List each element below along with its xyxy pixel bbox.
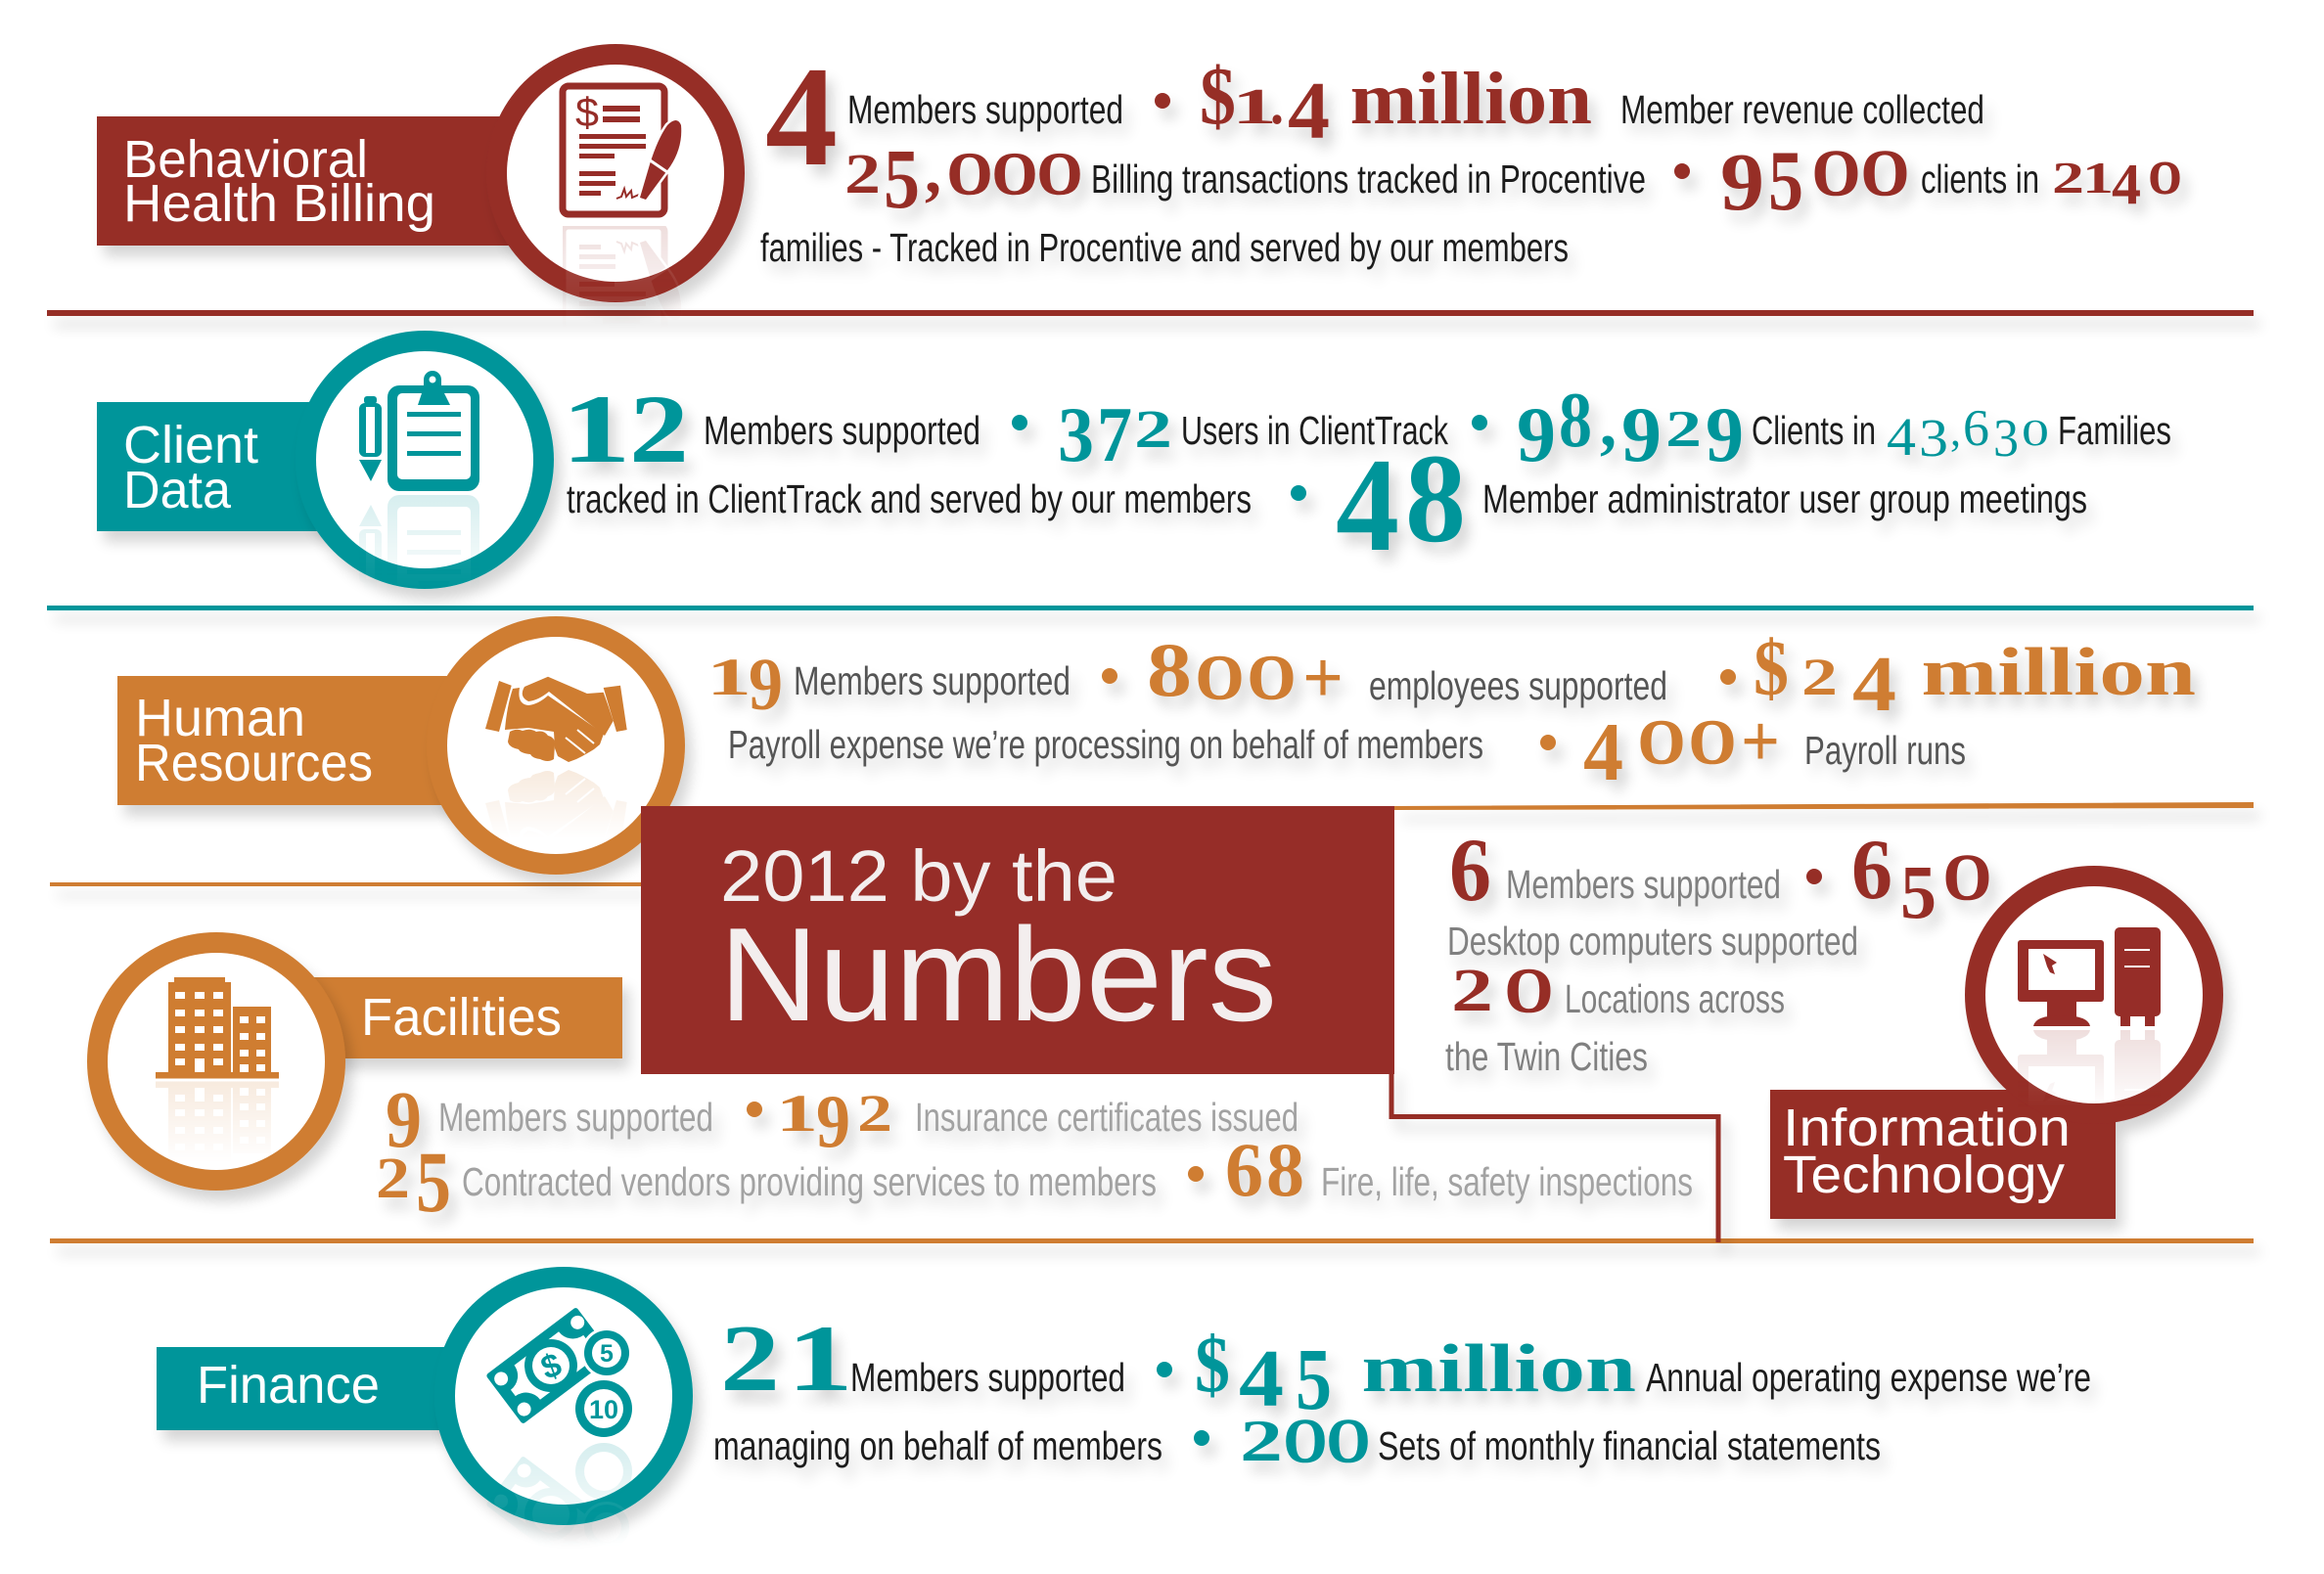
number: 200: 0 <box>1327 1409 1370 1475</box>
icon: desktop computer <box>2018 927 2161 1026</box>
stats text <box>561 375 2171 579</box>
label: human resources <box>117 676 455 805</box>
number: 25,000: 2 <box>844 142 881 205</box>
number: 4: 4 <box>765 37 838 196</box>
number: 25,000: , <box>925 133 941 208</box>
stats text <box>376 1074 1693 1231</box>
label and ring: information technology <box>1770 866 2223 1219</box>
number: 372: 3 <box>1058 390 1094 478</box>
number: 800+: 8 <box>1147 627 1192 712</box>
stats text: Clients in <box>1752 408 1876 453</box>
number: 650: 6 <box>1851 823 1892 918</box>
stats text: managing on behalf of members <box>713 1423 1162 1468</box>
number: 98,929: , <box>1600 386 1617 462</box>
panel: client data <box>97 331 2171 615</box>
label: finance: Finance <box>197 1356 380 1415</box>
number: 21: 1 <box>787 1306 853 1411</box>
panel: human resources <box>117 616 2196 875</box>
label and ring: information technology: Information <box>1783 1099 2071 1157</box>
stats text: Members supported <box>850 1355 1125 1400</box>
number: 372: 2 <box>1134 399 1172 459</box>
label: behavioral health billing <box>97 116 513 246</box>
number: 43,630: 0 <box>2022 413 2049 454</box>
number: 2140: 2 <box>2052 153 2084 202</box>
stats text: Users in ClientTrack <box>1181 408 1448 453</box>
icon text: coin labels: 10 <box>589 1395 618 1424</box>
number: 2140: 1 <box>2082 153 2114 202</box>
number: 12: 1 <box>561 375 631 483</box>
label: behavioral health billing: Health Billing <box>123 174 435 233</box>
number: 98,929: 9 <box>1517 390 1556 478</box>
label: behavioral health billing: Behavioral <box>123 130 368 189</box>
number: 43,630: 6 <box>1963 400 1989 457</box>
number: $45 million: $ <box>1195 1320 1230 1409</box>
stats text: Contracted vendors providing services to members <box>462 1159 1157 1204</box>
icon reflection <box>563 226 681 302</box>
stats text: Sets of monthly financial statements <box>1378 1423 1881 1468</box>
number: $24 million: $ <box>1754 626 1789 712</box>
number: $1.4 million: $ <box>1200 51 1236 142</box>
title line one: 2012 by the <box>720 835 1117 917</box>
title panel: 2012 by the Numbers <box>641 806 1394 1074</box>
number: 400+: 0 <box>1689 707 1736 777</box>
stats text: the Twin Cities <box>1445 1034 1648 1079</box>
divider: orange rule left <box>50 882 647 886</box>
label: client data: Client <box>123 416 258 474</box>
number: 192: 9 <box>816 1079 850 1163</box>
number: 6: 6 <box>1449 820 1491 920</box>
number: 400+: 4 <box>1583 706 1623 798</box>
stats text: tracked in ClientTrack and served by our members <box>567 476 1252 521</box>
icon: cash and coins <box>485 1307 632 1437</box>
stats text: clients in <box>1921 157 2039 202</box>
number: 9500: 0 <box>1812 138 1860 209</box>
label: client data <box>97 402 328 531</box>
number: $24 million: million <box>1898 635 2196 710</box>
icon text: coin labels: $ <box>536 1346 567 1387</box>
ring <box>87 932 345 1191</box>
icon reflection <box>487 1443 632 1526</box>
label: finance <box>157 1347 450 1430</box>
number: 19: 1 <box>706 648 752 706</box>
number: 43,630: , <box>1950 407 1961 455</box>
number: 372: 7 <box>1097 390 1132 478</box>
number: $1.4 million: 4 <box>1288 66 1330 157</box>
number: 200: 0 <box>1284 1409 1327 1475</box>
number: 25: 5 <box>416 1135 451 1231</box>
number: 48: 8 <box>1405 428 1466 569</box>
stats text: Billing transactions tracked in Procentive <box>1091 157 1646 202</box>
stats text: Fire, life, safety inspections <box>1321 1159 1693 1204</box>
connector: maroon stepped line <box>1391 1066 1718 1242</box>
number: 25,000: 5 <box>884 131 920 226</box>
number: 68: 6 <box>1225 1127 1263 1212</box>
divider: orange rule top right <box>1394 802 2254 810</box>
number: 400+: 0 <box>1638 707 1685 777</box>
number: 800+: + <box>1302 637 1344 719</box>
number: 192: 2 <box>857 1084 892 1143</box>
stats text: Payroll expense we’re processing on behalf of members <box>728 722 1483 767</box>
stats text: Member revenue collected <box>1620 87 1984 132</box>
title line two: Numbers <box>719 900 1277 1049</box>
stats text: Desktop computers supported <box>1447 919 1858 964</box>
label: client data: Data <box>123 461 232 519</box>
stats text: Members supported <box>847 87 1123 132</box>
number: $45 million: 4 <box>1239 1333 1284 1424</box>
number: 43,630: 3 <box>1993 408 2019 468</box>
panel: information technology <box>1445 820 2223 1219</box>
number: $1.4 million: million <box>1330 58 1592 140</box>
number: 68: 8 <box>1266 1127 1304 1212</box>
icon reflection <box>156 1082 279 1142</box>
label: human resources: Human <box>135 689 305 747</box>
number: 25: 2 <box>376 1146 410 1210</box>
icon: buildings <box>156 977 279 1078</box>
stats text: Members supported <box>1506 862 1781 907</box>
stats text: Payroll runs <box>1804 728 1966 773</box>
stats text <box>760 37 2181 270</box>
icon text: dollar sign: $ <box>575 89 599 135</box>
number: 9500: 0 <box>1861 138 1909 209</box>
number: 19: 9 <box>749 644 783 726</box>
panel: behavioral health billing <box>97 37 2181 354</box>
panel: finance <box>157 1267 2091 1573</box>
number: 192: 1 <box>776 1084 818 1143</box>
number: 9500: 9 <box>1720 137 1764 228</box>
stats text <box>706 626 2196 798</box>
stats text: Insurance certificates issued <box>915 1095 1299 1140</box>
icon: clipboard and pencil <box>359 371 479 491</box>
number: 200: 2 <box>1240 1409 1283 1473</box>
stats text: Members supported <box>794 658 1071 703</box>
number: 9500: 5 <box>1768 134 1803 229</box>
stats text: Locations across <box>1565 976 1785 1021</box>
ring <box>434 1267 693 1525</box>
label: facilities: Facilities <box>361 988 562 1047</box>
number: $45 million: 5 <box>1296 1331 1332 1428</box>
ring <box>296 331 554 589</box>
number: 2140: 0 <box>2149 153 2181 203</box>
number: 98,929: 2 <box>1665 401 1702 458</box>
icon text: coin labels: 5 <box>600 1340 614 1368</box>
number: 98,929: 9 <box>1621 390 1662 478</box>
number: $24 million: 4 <box>1852 642 1896 728</box>
number: 2140: 4 <box>2112 152 2141 216</box>
number: 48: 4 <box>1336 430 1399 579</box>
number: 650: 0 <box>1943 842 1991 914</box>
number: 800+: 0 <box>1196 643 1244 712</box>
number: 400+: + <box>1741 700 1780 783</box>
icon: billing document with pen <box>563 86 681 214</box>
number: $1.4 million: 1 <box>1232 79 1277 135</box>
number: 650: 5 <box>1900 849 1937 934</box>
label: human resources: Resources <box>135 734 373 792</box>
stats text <box>713 1306 2091 1475</box>
number: 43,630: 3 <box>1919 408 1948 468</box>
icon: handshake <box>485 677 627 762</box>
stats text: Member administrator user group meetings <box>1482 476 2087 521</box>
label: facilities <box>314 977 622 1058</box>
label and ring: information technology: Technology <box>1783 1146 2065 1204</box>
stats text: Members supported <box>438 1095 713 1140</box>
number: $24 million: 2 <box>1801 648 1838 706</box>
stats text: Families <box>2058 408 2171 453</box>
icon reflection <box>2018 1030 2161 1089</box>
number: 25,000: 0 <box>992 142 1037 206</box>
stats text: Annual operating expense we’re <box>1646 1355 2091 1400</box>
number: 25,000: 0 <box>1037 142 1082 206</box>
number: 800+: 0 <box>1248 643 1296 712</box>
number: 20: 0 <box>1505 956 1553 1025</box>
number: 9: 9 <box>386 1074 422 1164</box>
icon reflection <box>359 495 479 571</box>
stats text: families - Tracked in Procentive and served by our members <box>760 225 1569 270</box>
divider: maroon rule <box>47 310 2254 316</box>
number: 98,929: 8 <box>1559 378 1592 464</box>
ring <box>427 616 685 875</box>
number: 43,630: 4 <box>1887 407 1916 467</box>
number: $45 million: million <box>1339 1331 1636 1407</box>
stats text: Members supported <box>704 408 980 453</box>
divider: teal rule <box>47 606 2254 610</box>
stats text: employees supported <box>1369 663 1667 708</box>
icon text: coin labels <box>536 1340 618 1424</box>
ring <box>486 44 745 302</box>
icon reflection <box>485 770 626 821</box>
divider: orange rule bottom <box>50 1238 2254 1243</box>
panel: facilities <box>87 932 1693 1231</box>
number: $1.4 million: . <box>1270 71 1284 136</box>
number: 12: 2 <box>629 375 689 483</box>
number: 20: 2 <box>1451 958 1493 1024</box>
number: 25,000: 0 <box>947 142 992 206</box>
stats text <box>1445 820 1991 1079</box>
number: 98,929: 9 <box>1706 390 1744 478</box>
number: 21: 2 <box>720 1306 780 1411</box>
